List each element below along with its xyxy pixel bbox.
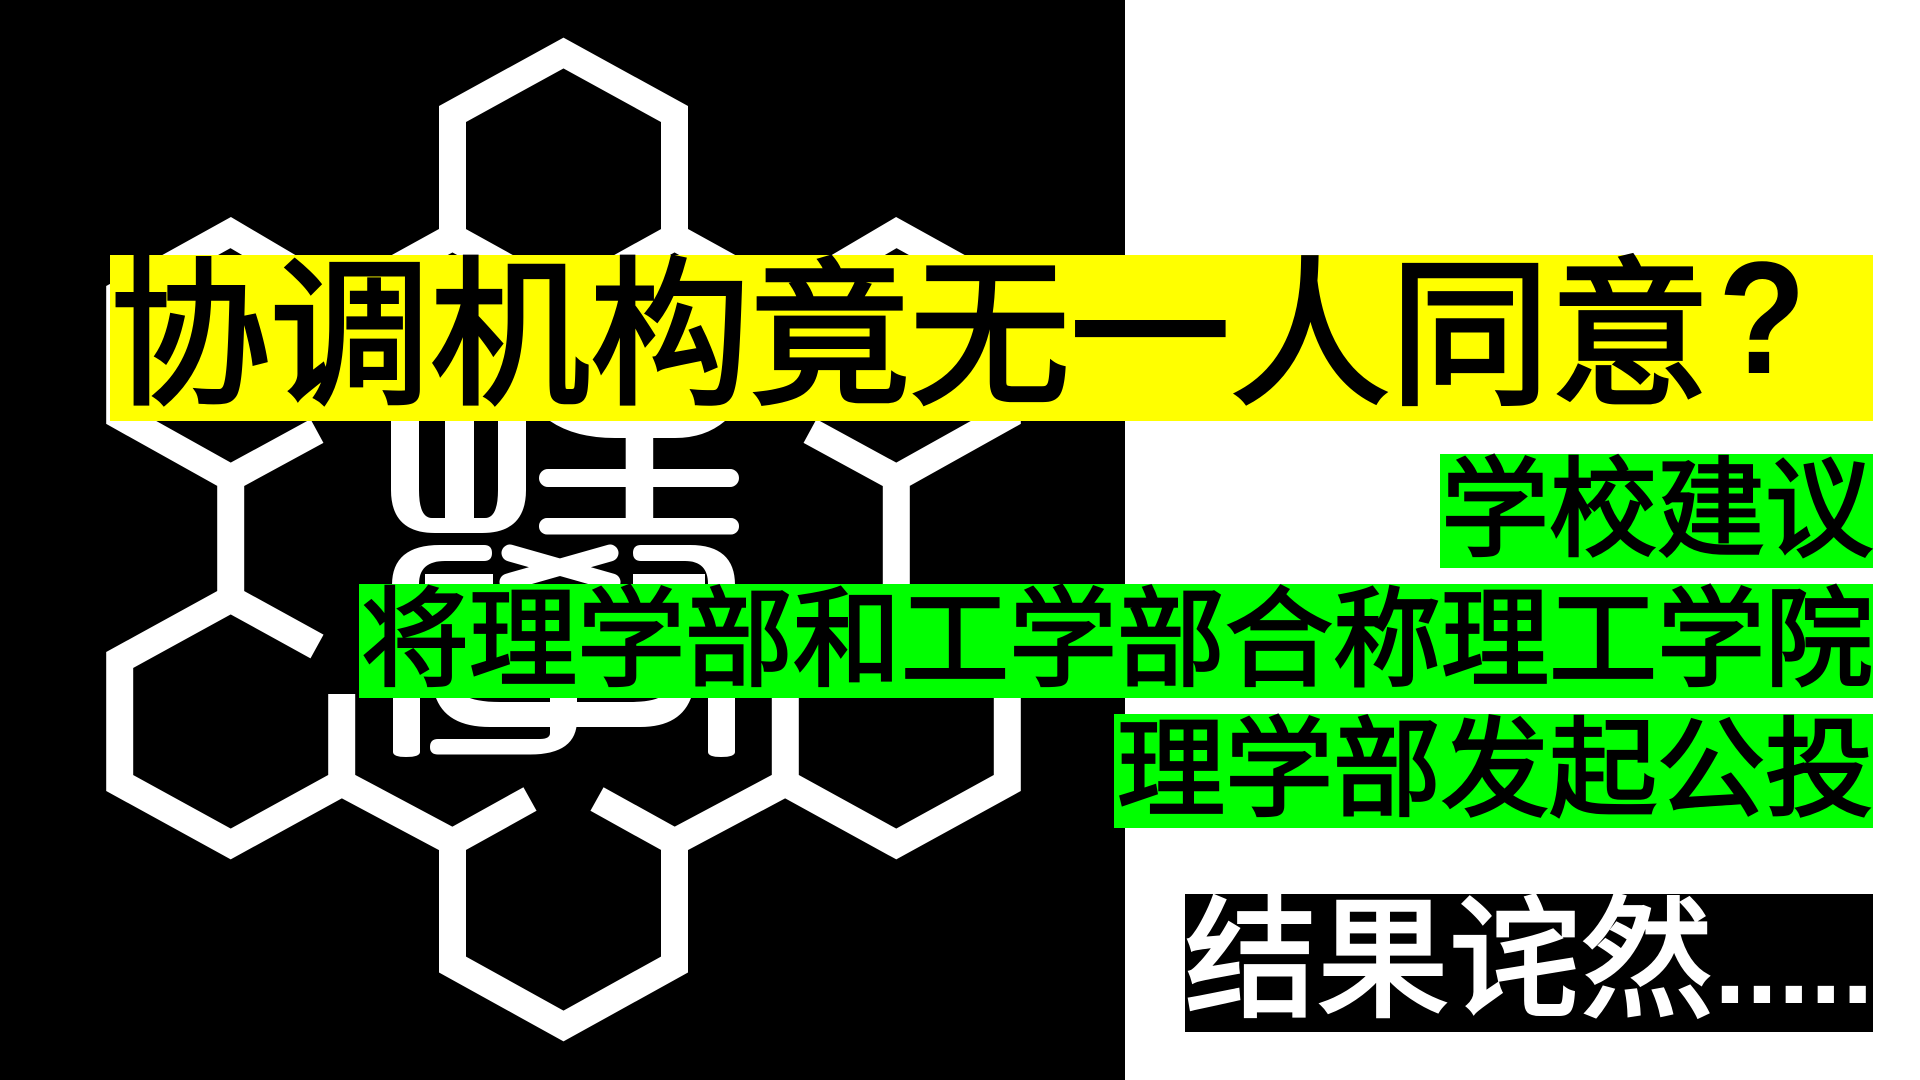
title banner: ? bbox=[1718, 228, 1806, 407]
green label: merge into science and engineering college: 将理学部和工学部合称理工学院 bbox=[361, 553, 1873, 709]
green label: science faculty referendum: 理学部发起公投 bbox=[1117, 683, 1873, 839]
black label: surprising result bbox=[1185, 894, 1873, 1032]
green label: school proposal: 学校建议 bbox=[1441, 423, 1873, 579]
icon: hexagon ring logo with central seal character bbox=[106, 38, 1021, 1042]
black label: surprising result: ..... bbox=[1714, 900, 1874, 1028]
panel: black left background bbox=[0, 0, 1125, 1080]
central seal character bbox=[391, 421, 739, 757]
title banner bbox=[110, 255, 1873, 421]
hexagon ring bbox=[120, 53, 1007, 1026]
title banner: 协调机构竟无一人同意 bbox=[110, 206, 1710, 438]
black label: surprising result: 结果诧然 bbox=[1185, 854, 1713, 1045]
